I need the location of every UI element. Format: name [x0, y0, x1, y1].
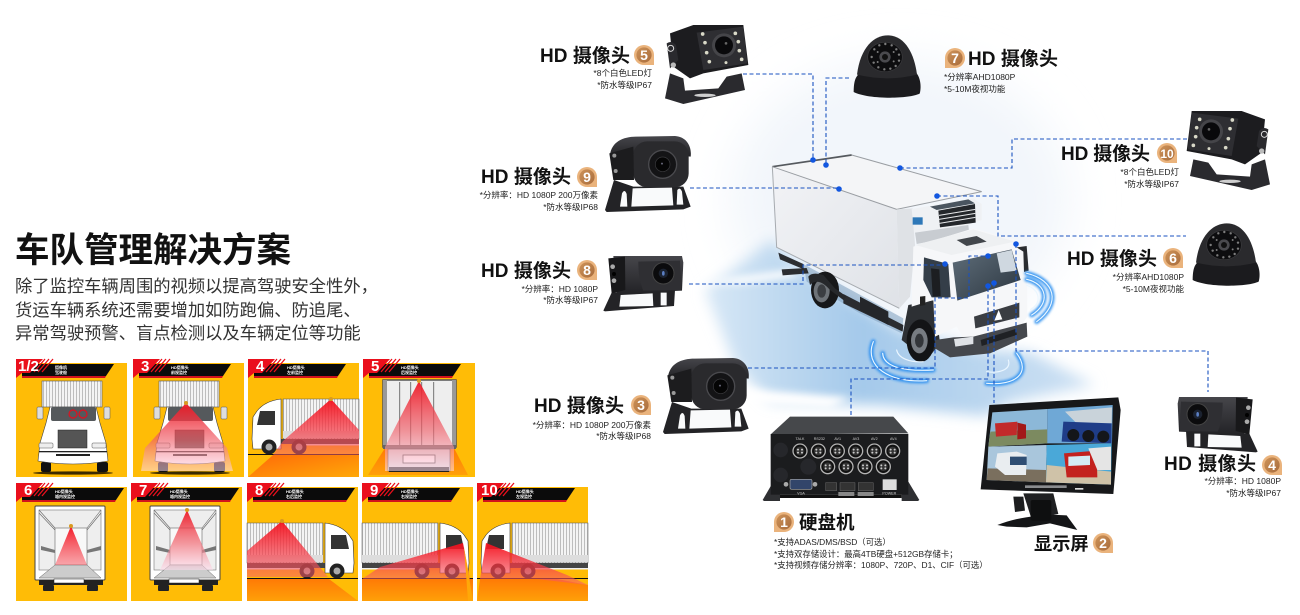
panel: camera view 10: 10: [481, 482, 498, 499]
icon: camera 3: [663, 358, 749, 434]
panel: camera view 5: 后视监控: [401, 369, 417, 375]
label: camera 10: HD 摄像头: [1061, 143, 1150, 165]
panel: camera view 1/2: [16, 358, 127, 477]
panel: camera view 5: HD摄像头: [401, 364, 419, 370]
label: camera 7: HD 摄像头: [968, 48, 1058, 70]
icon: DVR recorder: TALK: [796, 437, 805, 441]
label: camera 6: HD 摄像头: [1067, 248, 1157, 270]
icon: dome camera 6: [1193, 223, 1260, 286]
label: camera 3: *分辨率：HD 1080P 200万像素: [533, 420, 651, 430]
label: camera 10: 10: [1160, 147, 1174, 161]
panel: camera view 1/2: 1/2: [18, 358, 39, 375]
label: camera 6: *分辨率AHD1080P: [1113, 272, 1184, 282]
label: camera 8: [481, 260, 598, 305]
panel: camera view 9: [362, 482, 473, 601]
label: camera 9: *分辨率：HD 1080P 200万像素: [480, 190, 598, 200]
panel: camera view 5: [363, 358, 475, 477]
panel: camera view 8: HD摄像头: [286, 488, 304, 494]
label: monitor: [1034, 533, 1113, 554]
label: camera 5: [540, 45, 654, 90]
label: camera 6: [1067, 248, 1184, 294]
icon: camera 9: [605, 136, 691, 212]
description text: 除了监控车辆周围的视频以提高驾驶安全性外，: [15, 276, 378, 296]
icon: DVR recorder: AV4: [890, 437, 897, 441]
panel: camera view 10: [477, 482, 588, 601]
label: camera 7: *5-10M夜视功能: [944, 84, 1006, 94]
label: DVR specs: *支持双存储设计：最高4TB硬盘+512GB存储卡；: [774, 549, 958, 559]
panel: camera view 8: 8: [255, 482, 263, 499]
label: camera 5: *防水等级IP67: [597, 80, 652, 90]
panel: camera view 6: [16, 482, 127, 601]
panel: camera view 8: [247, 482, 358, 601]
panel: camera view 3: 3: [141, 358, 149, 375]
panel: camera view 9: 9: [370, 482, 378, 499]
truck illustration: [772, 155, 1052, 384]
label: camera 10: *防水等级IP67: [1124, 179, 1179, 189]
icon: DVR recorder: AV1: [834, 437, 841, 441]
panel: camera view 6: 6: [24, 482, 32, 499]
label: monitor: 2: [1099, 535, 1107, 551]
label: camera 4: *分辨率：HD 1080P: [1204, 476, 1281, 486]
label: camera 7: 7: [951, 50, 959, 66]
icon: monitor display: [981, 397, 1121, 530]
label: camera 5: *8个白色LED灯: [593, 68, 652, 78]
icon: DVR recorder: AV2: [871, 437, 878, 441]
label: camera 7: *分辨率AHD1080P: [944, 72, 1016, 82]
panel: camera view 9: HD摄像头: [401, 488, 419, 494]
panel: camera view 7: 7: [139, 482, 147, 499]
label: camera 8: HD 摄像头: [481, 260, 571, 282]
label: DVR specs: *支持ADAS/DMS/BSD（可选）: [774, 537, 891, 547]
label: camera 9: *防水等级IP68: [543, 202, 598, 212]
panel: camera view 5: 5: [371, 358, 379, 375]
description text: 异常驾驶预警、盲点检测以及车辆定位等功能: [15, 323, 361, 343]
icon: camera 8: [603, 256, 683, 311]
title: 车队管理解决方案: [15, 232, 291, 270]
label: DVR specs: 硬盘机: [799, 512, 855, 533]
label: camera 3: 3: [637, 397, 645, 413]
label: camera 5: 5: [640, 47, 648, 63]
icon: DVR recorder: [763, 417, 919, 501]
panel: camera view 3: [133, 358, 244, 477]
label: camera 3: [533, 395, 651, 441]
dashed connector lines: [689, 74, 1208, 415]
icon: camera 4: [1178, 397, 1258, 452]
panel: camera view 4: HD摄像头: [287, 364, 305, 370]
panel: camera view 7: [131, 482, 242, 601]
icon: camera 5: [665, 25, 748, 104]
background glow behind truck: [700, 60, 1095, 416]
label: camera 10: [1061, 143, 1179, 189]
label: camera 3: *防水等级IP68: [596, 431, 651, 441]
panel: camera view 6: 箱内视监控: [55, 493, 75, 499]
label: camera 6: 6: [1169, 250, 1177, 266]
description text: 货运车辆系统还需要增加如防跑偏、防追尾、: [15, 300, 361, 320]
label: camera 6: *5-10M夜视功能: [1123, 284, 1184, 294]
label: camera 8: 8: [583, 262, 591, 278]
icon: DVR recorder: RS232: [814, 437, 825, 441]
panel: camera view 4: 4: [256, 358, 265, 375]
label: camera 5: HD 摄像头: [540, 45, 630, 67]
label: camera 8: *防水等级IP67: [543, 295, 598, 305]
panel: camera view 1/2: 摄像机: [55, 364, 67, 370]
icon: camera 10: [1187, 111, 1270, 190]
panel: camera view 3: 前视监控: [171, 369, 187, 375]
label: camera 4: *防水等级IP67: [1226, 488, 1281, 498]
label: camera 10: *8个白色LED灯: [1120, 167, 1179, 177]
label: camera 8: *分辨率：HD 1080P: [521, 284, 598, 294]
label: DVR specs: *支持视频存储分辨率：1080P、720P、D1、CIF（可选）: [774, 560, 988, 570]
label: camera 9: HD 摄像头: [481, 166, 571, 188]
panel: camera view 4: 左前监控: [287, 369, 303, 375]
label: camera 3: HD 摄像头: [534, 395, 624, 417]
panel: camera view 9: 右视监控: [401, 493, 417, 499]
panel: camera view 10: HD摄像头: [516, 488, 534, 494]
label: camera 4: HD 摄像头: [1164, 453, 1256, 475]
panel: camera view 7: HD摄像头: [170, 488, 188, 494]
label: monitor: 显示屏: [1034, 534, 1089, 554]
description text: [15, 276, 378, 343]
label: camera 7: [944, 48, 1058, 94]
panel: camera view 6: HD摄像头: [55, 488, 73, 494]
icon: dome camera 7: [854, 35, 921, 98]
label: DVR specs: [774, 512, 988, 570]
panel: camera view 3: HD摄像头: [171, 364, 189, 370]
panel: camera view 10: 左视监控: [516, 493, 532, 499]
icon: DVR recorder: POWER: [882, 492, 897, 496]
icon: DVR recorder: VGA: [797, 492, 805, 496]
label: camera 9: 9: [583, 169, 591, 185]
label: DVR specs: 1: [780, 514, 788, 530]
label: camera 4: [1164, 453, 1282, 498]
panel: camera view 7: 箱内视监控: [170, 493, 190, 499]
panel: camera view 1/2: 驾驶舱: [55, 369, 67, 375]
label: camera 9: [480, 166, 598, 212]
panel: camera view 4: [248, 358, 359, 477]
label: camera 4: 4: [1268, 457, 1276, 473]
icon: DVR recorder: AV3: [853, 437, 859, 441]
panel: camera view 8: 右后监控: [286, 493, 302, 499]
